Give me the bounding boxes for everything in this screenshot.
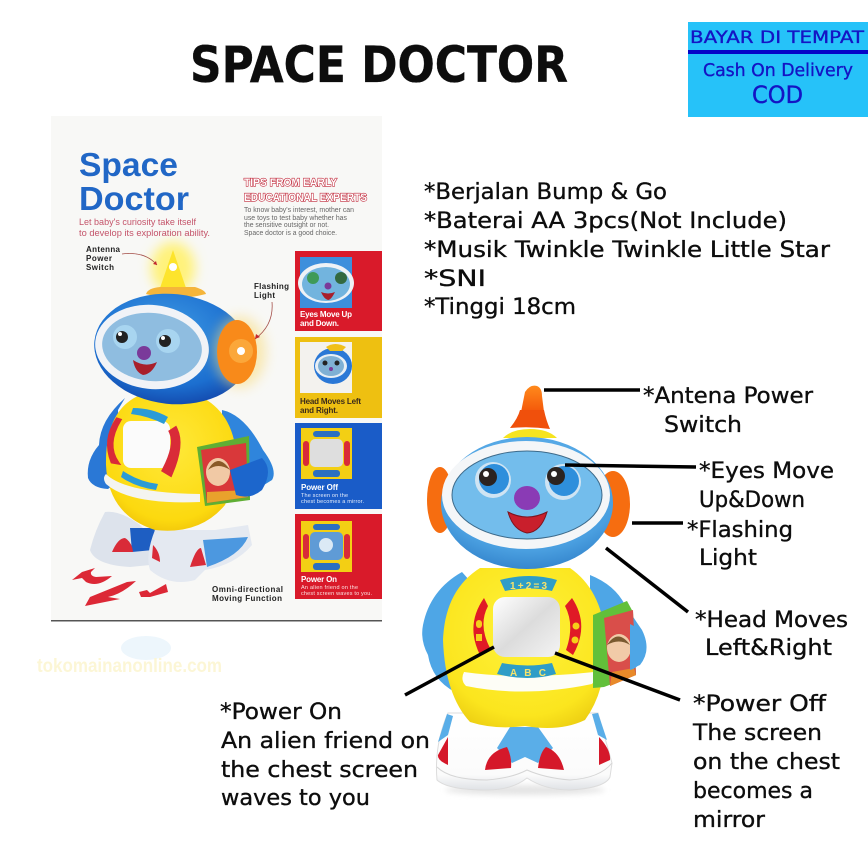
box callout labels: Flashing <box>254 282 289 291</box>
feature: power on: Power On <box>301 575 337 584</box>
tips text: EDUCATIONAL EXPERTS <box>244 192 367 204</box>
label: power off: on the chest <box>693 750 840 775</box>
label: power on: the chest screen <box>221 758 418 783</box>
label: power off: The screen <box>692 721 822 746</box>
book <box>197 436 250 506</box>
ears <box>427 467 630 537</box>
callout labels <box>220 384 848 833</box>
left red arc <box>473 598 490 655</box>
box heading: Doctor <box>79 180 189 217</box>
badge: cash on delivery: Cash On Delivery <box>703 60 853 81</box>
features list <box>424 180 831 320</box>
feature: power off: chest becomes a mirror. <box>301 499 364 505</box>
label: power on: waves to you <box>221 786 370 811</box>
badge: cash on delivery <box>688 22 868 117</box>
belt <box>104 474 200 502</box>
left arm <box>88 398 125 489</box>
tips text <box>244 177 367 237</box>
features list: *Berjalan Bump & Go <box>424 180 667 205</box>
feature: eyes: Eyes Move Up <box>300 310 352 319</box>
box heading: to develop its exploration ability. <box>79 228 210 239</box>
box callout labels: Antenna <box>86 245 121 254</box>
box callout labels: Power <box>86 254 112 263</box>
label: power on: *Power On <box>220 700 342 725</box>
tips text: use toys to test baby whether has <box>244 215 347 222</box>
hand <box>230 458 268 497</box>
eyes <box>475 462 581 500</box>
label 1+2=3 <box>500 576 557 592</box>
body <box>443 568 606 728</box>
book <box>593 601 636 688</box>
label: flashing light: *Flashing <box>687 518 793 543</box>
main robot photo <box>422 386 647 795</box>
chest screen <box>123 421 170 468</box>
label: head moves: Left&Right <box>705 636 832 661</box>
label: antenna: Switch <box>664 413 742 438</box>
box callout labels: Light <box>254 291 275 300</box>
box heading <box>79 146 210 239</box>
box callout labels <box>86 245 289 603</box>
right red arc <box>565 598 581 655</box>
feature: power on: chest screen waves to you. <box>301 591 372 597</box>
label: head moves: *Head Moves <box>695 608 848 633</box>
features list: *Tinggi 18cm <box>424 295 576 320</box>
mouth <box>508 512 547 533</box>
mouth <box>133 360 157 375</box>
label: antenna: *Antena Power <box>643 384 814 409</box>
features list: *Baterai AA 3pcs(Not Include) <box>424 209 787 234</box>
feature: eyes <box>295 251 382 331</box>
panel: product box <box>51 116 382 622</box>
arm left <box>422 572 478 692</box>
shoes <box>90 512 155 567</box>
feature: power on: An alien friend on the <box>301 585 358 591</box>
box heading: Space <box>79 146 178 183</box>
hand <box>630 624 646 670</box>
label: power off: *Power Off <box>693 692 827 717</box>
box callout labels: Omni-directional <box>212 585 283 594</box>
label: power on: An alien friend on <box>221 729 430 754</box>
label: power off: becomes a <box>693 779 813 804</box>
label: power on <box>220 700 430 811</box>
box callout labels: Moving Function <box>212 594 282 603</box>
label: head moves <box>695 608 848 661</box>
label: antenna <box>643 384 814 438</box>
label ABC <box>497 663 556 679</box>
chest screen <box>493 597 560 657</box>
feature: power on <box>295 514 382 599</box>
feature: power off: The screen on the <box>301 493 348 499</box>
label: flashing light <box>687 518 793 571</box>
label: flashing light: Light <box>699 546 757 571</box>
light glow <box>151 242 195 294</box>
tips text: Space doctor is a good choice. <box>244 230 337 237</box>
nose <box>137 346 151 360</box>
box heading: Let baby's curiosity take itself <box>79 217 196 228</box>
feature: eyes: and Down. <box>300 319 339 328</box>
right arm <box>222 410 274 495</box>
shoes <box>436 713 612 790</box>
arrows <box>72 568 168 606</box>
antenna <box>503 386 557 438</box>
label: eyes <box>699 459 834 513</box>
body <box>106 392 236 531</box>
nose <box>514 486 540 510</box>
label 1+2=3: 1+2=3 <box>510 581 547 592</box>
feature: head <box>295 337 382 418</box>
eyes <box>113 325 180 353</box>
label: power off <box>692 692 840 833</box>
callout lines <box>405 390 696 700</box>
arm right <box>590 575 647 670</box>
tips text: To know baby's interest, mother can <box>244 207 354 214</box>
floor shadow <box>445 785 605 795</box>
box callout labels: Switch <box>86 263 114 272</box>
label: eyes: *Eyes Move <box>699 459 834 484</box>
feature: head: and Right. <box>300 406 338 415</box>
visor <box>91 299 213 395</box>
visor <box>442 441 610 549</box>
badge: cash on delivery: COD <box>752 81 803 109</box>
feature: power off <box>295 423 382 509</box>
ear light <box>214 316 266 388</box>
watermark: tokomainanonline.com <box>37 656 222 677</box>
label ABC: A B C <box>510 668 546 679</box>
watermark <box>37 636 222 677</box>
features list: *SNI <box>424 267 486 292</box>
title: SPACE DOCTOR <box>190 36 568 94</box>
chest details <box>108 419 120 463</box>
box robot <box>72 242 274 606</box>
tips text: the sensitive outsight or not. <box>244 222 329 229</box>
head <box>89 286 255 412</box>
label: power off: mirror <box>693 808 766 833</box>
head <box>441 437 613 569</box>
features list: *Musik Twinkle Twinkle Little Star <box>424 238 831 263</box>
tips text: TIPS FROM EARLY <box>244 177 338 189</box>
feature: head: Head Moves Left <box>300 397 361 406</box>
label: eyes: Up&Down <box>699 488 805 513</box>
belt <box>462 672 595 692</box>
feature: power off: Power Off <box>301 483 338 492</box>
badge: cash on delivery: BAYAR DI TEMPAT <box>690 28 865 48</box>
